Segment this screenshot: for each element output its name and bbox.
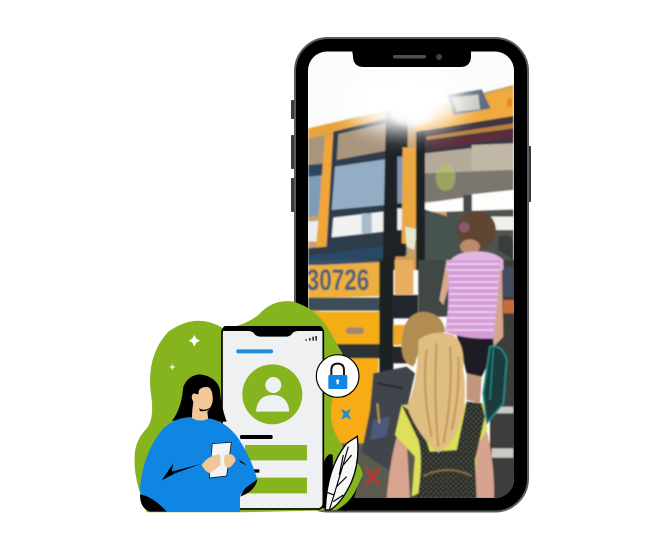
hair strand over neck xyxy=(199,407,212,411)
earpiece speaker xyxy=(393,55,426,58)
black lower right shape xyxy=(240,479,257,497)
keyhole xyxy=(335,379,340,384)
girl in striped pink shirt xyxy=(445,211,513,270)
striped shirt body xyxy=(307,260,501,498)
phone notch xyxy=(352,50,471,67)
bus lower body xyxy=(308,260,515,500)
second child with grey backpack xyxy=(362,312,445,485)
black lower left shape xyxy=(140,494,167,512)
app phone xyxy=(222,326,323,509)
green blob background xyxy=(135,301,363,512)
handheld phone xyxy=(209,442,231,478)
sun glare xyxy=(345,68,465,132)
blue star xyxy=(341,408,351,420)
woman figure xyxy=(140,374,257,512)
front child: yellow shirt and dotted backpack xyxy=(387,333,494,498)
hair xyxy=(172,374,227,422)
phone body xyxy=(295,38,528,512)
front camera xyxy=(436,54,442,60)
side buttons xyxy=(291,100,531,212)
bus number: 30726 xyxy=(307,264,369,297)
blue title bar xyxy=(236,349,273,353)
bus upper body xyxy=(308,85,513,270)
black leaf base xyxy=(337,487,357,511)
small sparkle xyxy=(189,335,200,347)
lock badge xyxy=(316,355,359,397)
white leaf xyxy=(325,436,358,510)
app notch and top edge xyxy=(222,326,323,337)
sleeve fold xyxy=(239,459,247,466)
phone frame xyxy=(222,327,323,509)
tiny sparkle xyxy=(169,364,176,370)
sweater fold lines xyxy=(162,463,201,480)
smartphone xyxy=(291,38,531,512)
hands xyxy=(202,454,221,473)
profile avatar xyxy=(242,364,302,424)
right hand xyxy=(224,454,236,468)
secondary glare xyxy=(392,112,434,128)
illustration: woman using phone xyxy=(135,301,363,512)
black background leaf xyxy=(323,454,333,508)
face and neck xyxy=(192,387,213,423)
signal bars xyxy=(305,336,317,341)
infographic canvas xyxy=(134,37,531,512)
green button one xyxy=(245,445,307,460)
small black mark xyxy=(253,469,259,473)
blue sweater xyxy=(140,417,257,512)
black text line xyxy=(240,435,273,439)
phone screen photo: children boarding a school bus xyxy=(307,51,515,500)
lock body xyxy=(328,375,347,389)
shackle xyxy=(331,364,344,376)
green button two xyxy=(245,478,307,493)
